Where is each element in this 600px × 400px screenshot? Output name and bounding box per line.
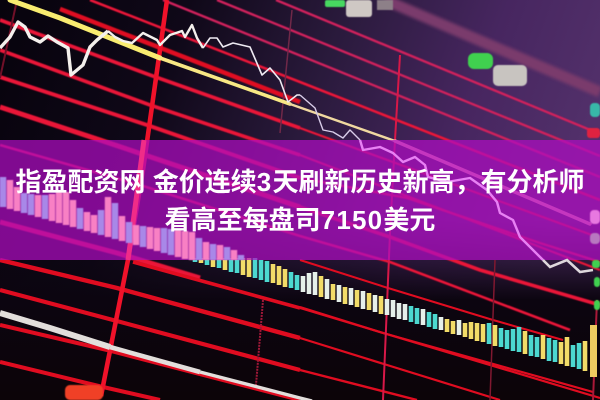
- vertical line inside band: [128, 140, 144, 260]
- title: [16, 167, 584, 235]
- blurred stripe upper right: [385, 0, 600, 92]
- title: 指盈配资网 金价连续3天刷新历史新高，有分析师: [16, 167, 584, 197]
- volume bars inside band: [3, 177, 241, 260]
- volume bars outside band: [195, 258, 585, 371]
- right edge yellow bar: [590, 325, 597, 377]
- red grid lines, lower part: [0, 260, 600, 400]
- red blob bottom left: [65, 385, 103, 400]
- title: 看高至每盘司7150美元: [165, 205, 435, 235]
- white price curve: [0, 22, 360, 140]
- price curve end below band: [543, 260, 593, 272]
- right edge band markers: [590, 210, 600, 310]
- red grid lines, upper part: [163, 0, 600, 177]
- price curve inside band: [360, 140, 543, 260]
- yellow moving average line: [10, 0, 590, 224]
- blurred status labels: [325, 0, 600, 138]
- magenta band: [0, 140, 600, 260]
- bottom white moving average line: [0, 313, 312, 400]
